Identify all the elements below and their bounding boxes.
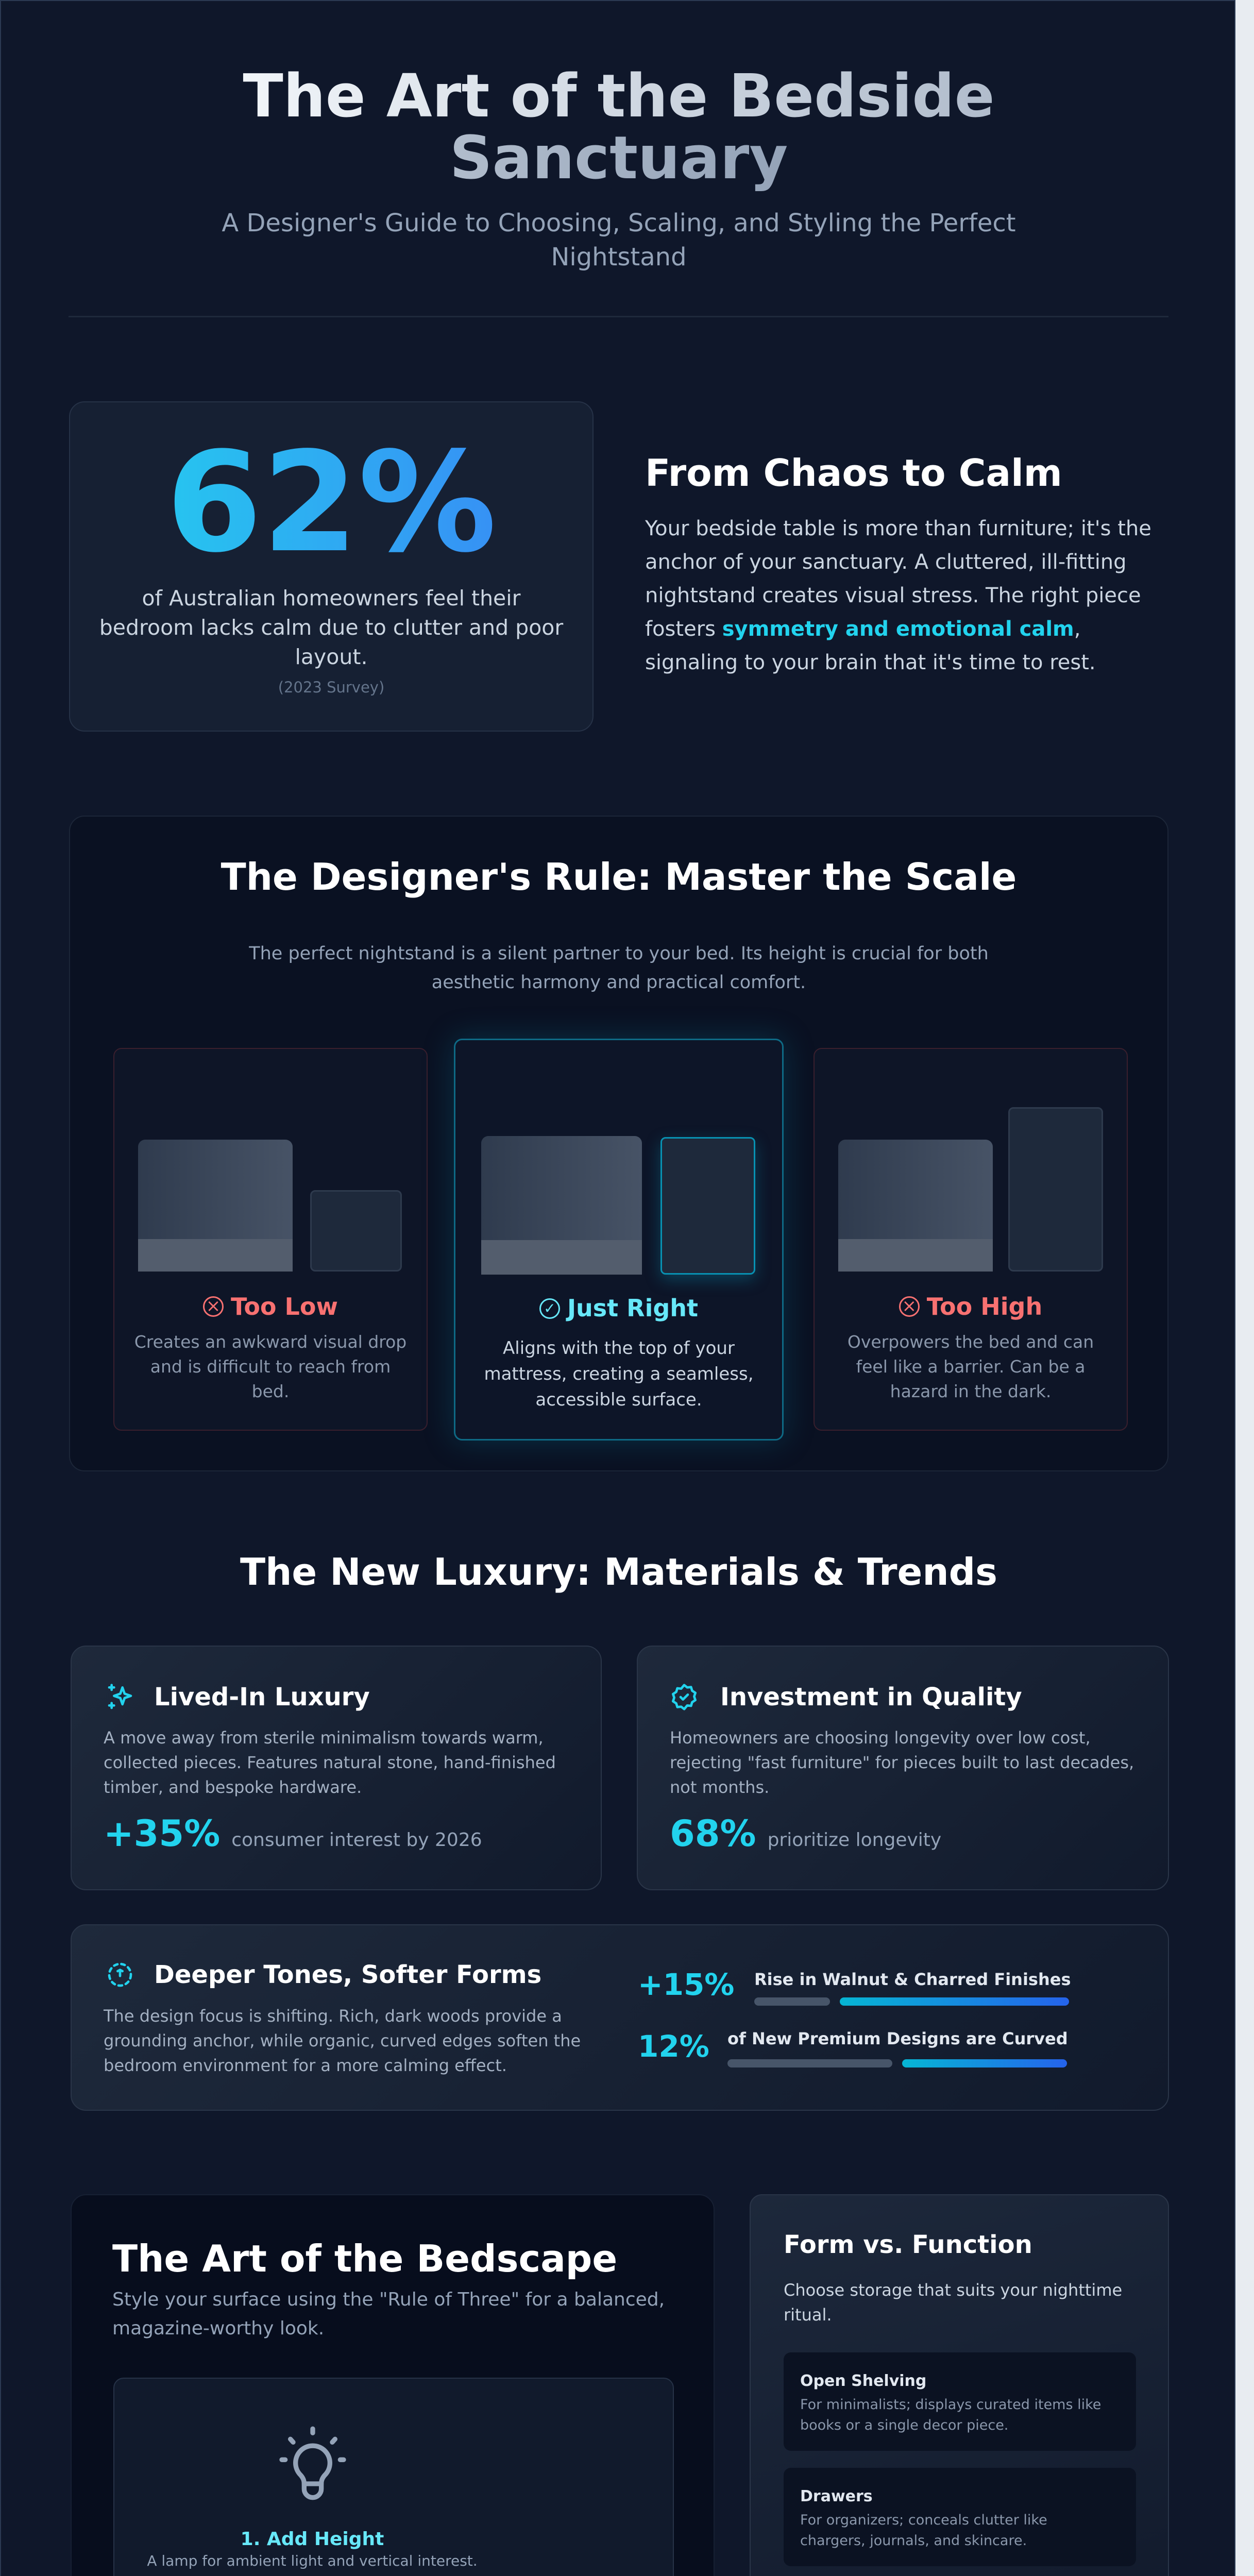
body: The design focus is shifting. Rich, dark woods provide a — [104, 2006, 562, 2026]
stat: 68% prioritize longevity — [670, 1812, 941, 1855]
option: open shelving: For minimalists; displays curated items like — [800, 2397, 1101, 2413]
subtitle: A Designer's Guide to Choosing, Scaling, and Styling the Perfect — [222, 209, 1016, 238]
stat: walnut: Rise in Walnut & Charred Finishes — [754, 1970, 1071, 1989]
option: open shelving: Open Shelving — [800, 2372, 926, 2390]
body: Homeowners are choosing longevity over low cost, — [670, 1728, 1091, 1748]
title: Deeper Tones, Softer Forms — [154, 1960, 541, 1989]
option: drawers: chargers, journals, and skincare. — [800, 2533, 1027, 2549]
stat: curved: of New Premium Designs are Curved — [727, 2029, 1068, 2048]
description: and is difficult to reach from — [150, 1357, 391, 1377]
option: open shelving — [784, 2352, 1136, 2451]
description — [134, 1332, 406, 1401]
body: A move away from sterile minimalism towards warm, — [104, 1728, 544, 1748]
subtitle — [222, 209, 1016, 272]
description: accessible surface. — [535, 1389, 702, 1410]
text block: chaos to calm — [645, 517, 1151, 674]
stat description: of Australian homeowners feel their — [142, 586, 521, 611]
text block: chaos to calm: Your bedside table is more than furniture; it's the — [645, 517, 1151, 540]
icon: lamp — [272, 2422, 354, 2504]
subtitle — [112, 2285, 665, 2343]
label: just right: ✓ — [544, 1300, 556, 1317]
description: Aligns with the top of your — [503, 1338, 735, 1359]
label: too high: × — [902, 1296, 917, 1316]
title: The Art of the Bedscape — [112, 2237, 617, 2280]
stat description: bedroom lacks calm due to clutter and poor — [99, 615, 563, 640]
source note: (2023 Survey) — [278, 679, 384, 696]
intro text: aesthetic harmony and practical comfort. — [432, 972, 806, 993]
card: form vs function — [750, 2194, 1169, 2576]
description: Choose storage that suits your nighttime — [784, 2280, 1122, 2300]
intro text — [249, 943, 989, 993]
body: grounding anchor, while organic, curved edges soften the — [104, 2031, 581, 2050]
description: mattress, creating a seamless, — [484, 1364, 754, 1384]
heading: new luxury: The New Luxury: Materials & Trends — [240, 1550, 997, 1594]
card: investment in quality — [637, 1646, 1169, 1890]
text block: chaos to calm: fosters symmetry and emotional calm, — [645, 617, 1080, 641]
description: Overpowers the bed and can — [848, 1332, 1094, 1352]
step 1: A lamp for ambient light and vertical interest. — [147, 2552, 478, 2569]
subtitle: Nightstand — [551, 243, 687, 272]
card: lived-in luxury — [71, 1646, 602, 1890]
heading: From Chaos to Calm: From Chaos to Calm — [645, 451, 1062, 495]
title: Sanctuary — [450, 124, 788, 193]
description: bed. — [252, 1381, 289, 1401]
body — [104, 1728, 556, 1797]
option: drawers — [784, 2468, 1136, 2566]
text block: chaos to calm: nightstand creates visual stress. The right piece — [645, 584, 1141, 607]
option: drawers: Drawers — [800, 2487, 873, 2505]
subtitle: magazine-worthy look. — [112, 2318, 324, 2339]
description: ritual. — [784, 2305, 832, 2325]
big number — [70, 426, 592, 580]
stat: curved — [638, 2029, 1068, 2067]
description: Creates an awkward visual drop — [134, 1332, 406, 1352]
body: bedroom environment for a more calming effect. — [104, 2056, 507, 2075]
description: feel like a barrier. Can be a — [856, 1357, 1085, 1377]
body: not months. — [670, 1777, 769, 1797]
panel: bedscape — [71, 2194, 715, 2576]
title: Lived-In Luxury — [154, 1683, 370, 1711]
option: drawers: For organizers; conceals clutter like — [800, 2512, 1047, 2528]
label: too high: Too High — [927, 1293, 1042, 1320]
description — [484, 1338, 754, 1410]
body — [103, 2006, 581, 2075]
label: too low: × — [206, 1296, 221, 1316]
icon: badge check — [672, 1684, 697, 1710]
stat: +35% consumer interest by 2026 — [104, 1812, 482, 1855]
card: too low — [113, 1048, 428, 1431]
intro text: The perfect nightstand is a silent partner to your bed. Its height is crucial for both — [249, 943, 989, 964]
stat description — [99, 586, 564, 669]
big number: 62% — [166, 422, 497, 583]
subtitle: Style your surface using the "Rule of Three" for a balanced, — [112, 2289, 665, 2310]
card: just right — [454, 1039, 784, 1440]
option: open shelving: books or a single decor piece. — [800, 2417, 1008, 2433]
label: just right: Just Right — [567, 1294, 698, 1322]
stat: walnut — [638, 1967, 1071, 2006]
label: too low: Too Low — [231, 1293, 338, 1320]
card: too high — [814, 1048, 1128, 1431]
description — [848, 1332, 1094, 1401]
icon: dashed circle — [108, 1963, 132, 1987]
stat: walnut: +15% — [638, 1967, 734, 2002]
inner box: rule of three — [113, 2378, 674, 2576]
illustration: aligned nightstand — [481, 1136, 762, 1286]
title — [243, 62, 995, 193]
step 1: 1. Add Height — [241, 2529, 384, 2550]
heading: The Designer's Rule: Master the Scale — [221, 855, 1016, 899]
body: timber, and bespoke hardware. — [104, 1777, 362, 1797]
title: Investment in Quality — [720, 1683, 1022, 1711]
illustration: low nightstand — [138, 1140, 402, 1272]
panel: master the scale — [69, 816, 1168, 1471]
stat: curved: 12% — [638, 2029, 709, 2064]
stat description: layout. — [295, 645, 367, 669]
icon: sparkles — [108, 1684, 132, 1709]
body: rejecting "fast furniture" for pieces built to last decades, — [670, 1753, 1134, 1772]
title: The Art of the Bedside — [243, 62, 995, 131]
body — [670, 1728, 1134, 1797]
description — [784, 2278, 1122, 2327]
description: hazard in the dark. — [890, 1381, 1051, 1401]
body: collected pieces. Features natural stone, hand-finished — [104, 1753, 556, 1772]
text block: chaos to calm: anchor of your sanctuary. A cluttered, ill-fitting — [645, 550, 1127, 574]
step 1 — [114, 2528, 510, 2574]
illustration: tall nightstand — [838, 1107, 1103, 1272]
title: Form vs. Function — [784, 2230, 1032, 2259]
text block: chaos to calm: signaling to your brain that it's time to rest. — [645, 651, 1096, 674]
card: deeper tones — [71, 1924, 1169, 2111]
stat card: 62% — [69, 401, 594, 732]
